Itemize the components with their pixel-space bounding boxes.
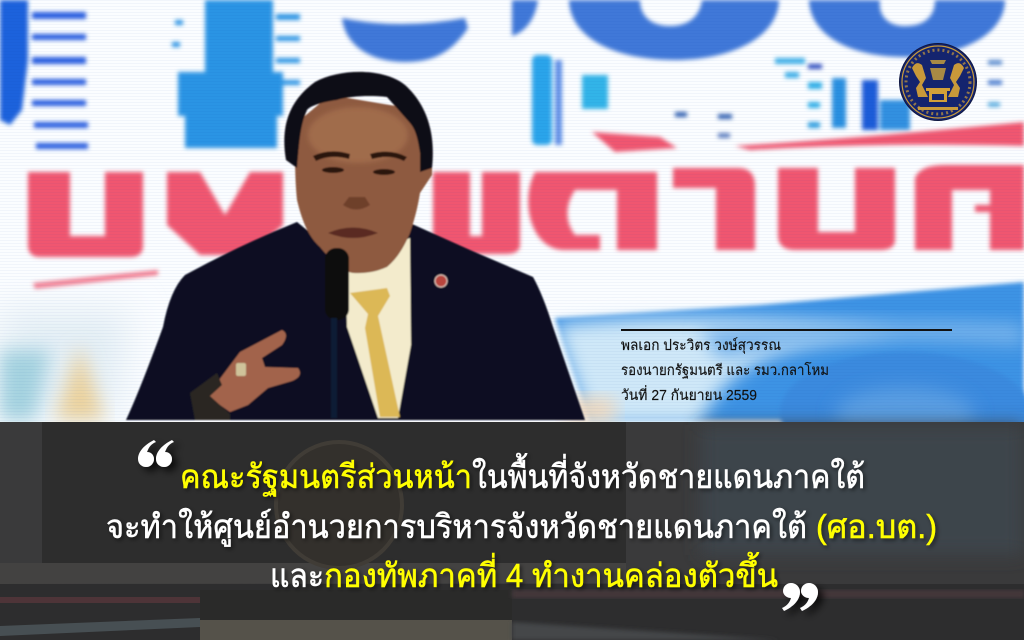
eyes and brows: [313, 151, 407, 238]
speaker position: รองนายกรัฐมนตรี และ รมว.กลาโหม: [621, 361, 829, 379]
lapel pin: [435, 275, 447, 287]
ring: [236, 363, 246, 376]
blue building graphic left: [0, 0, 88, 149]
podium: [42, 422, 626, 565]
blue text small detail right: [532, 55, 1002, 145]
head: [295, 95, 432, 273]
faint government seal on podium: [276, 442, 402, 568]
opening quotation mark: [138, 440, 174, 467]
necktie: [350, 288, 400, 417]
date: วันที่ 27 กันยายน 2559: [621, 385, 757, 404]
right side blue tint: [700, 425, 1024, 555]
microphone: [325, 248, 349, 418]
hair: [284, 72, 433, 172]
red large headline letters: [28, 122, 1024, 289]
screen scanlines: [0, 0, 1024, 422]
line 1: [180, 453, 865, 497]
blue lower screen band: [0, 282, 1024, 472]
blue building graphic centre: [172, 0, 300, 148]
wristwatch: [190, 373, 230, 420]
pedestal: [926, 88, 950, 102]
lion right: [948, 63, 964, 97]
gesturing hand: [207, 330, 300, 412]
lion left: [912, 63, 928, 97]
blue large numerals 300: [342, 0, 1005, 62]
podium ledge: [0, 563, 626, 584]
closing quotation mark: [782, 583, 818, 611]
suit: [126, 222, 585, 420]
speaker name: พลเอก ประวิตร วงษ์สุวรรณ: [621, 337, 781, 354]
line 1: คณะรัฐมนตรีส่วนหน้า: [180, 458, 472, 497]
quote text: [106, 453, 937, 594]
red stage stripes: [0, 597, 200, 603]
caption rule: [621, 329, 952, 331]
forehead highlight: [308, 107, 408, 163]
line 2: จะทำให้ศูนย์อำนวยการบริหารจังหวัดชายแดนภาคใต้: [106, 508, 807, 547]
neck and shirt: [345, 238, 411, 418]
line 2: (ศอ.บต.): [816, 508, 937, 545]
speaker: man in dark suit at microphone: [126, 72, 585, 420]
line 3: กองทัพภาคที่ 4 ทำงานคล่องตัวขึ้น: [324, 552, 778, 594]
dark translucent quote panel: [0, 422, 1024, 640]
podium stand: [200, 590, 512, 620]
line 3: และ: [270, 557, 324, 594]
central vessel: [930, 60, 946, 80]
base band: [918, 107, 958, 110]
icon: Thai government seal: [900, 44, 976, 120]
speaker caption: [621, 329, 952, 404]
line 1: ในพื้นที่จังหวัดชายแดนภาคใต้: [472, 453, 865, 495]
